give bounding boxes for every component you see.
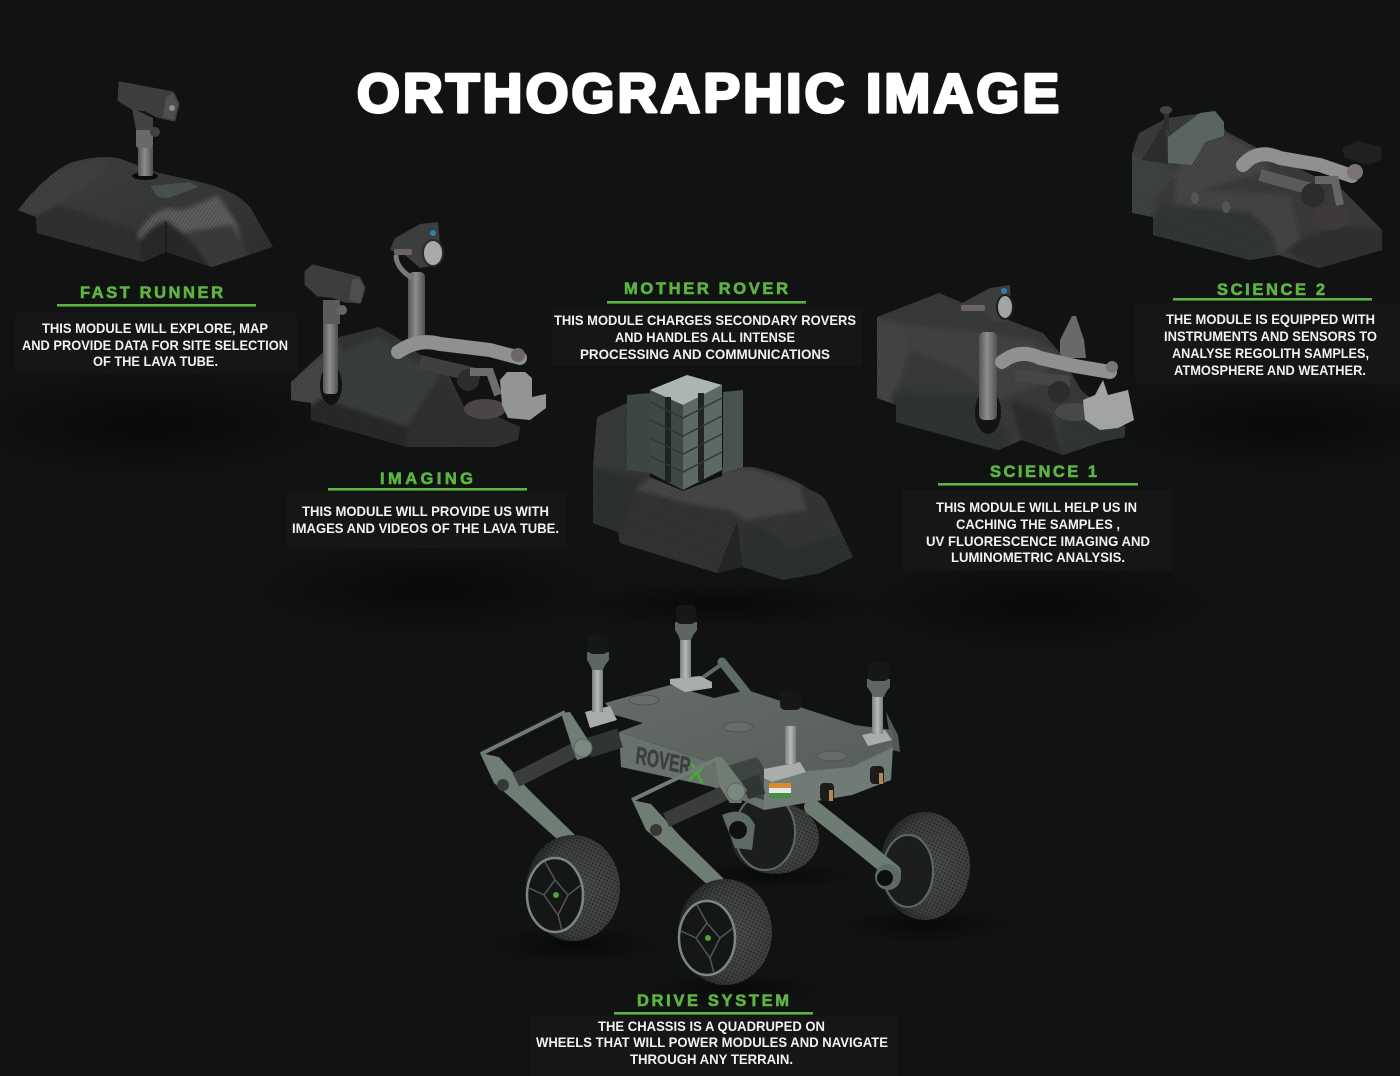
pole and hole (975, 390, 1001, 434)
rear right leg and wheel (812, 712, 970, 920)
side ports (820, 766, 884, 801)
camera head left (306, 266, 364, 302)
gripper (500, 372, 546, 420)
heading: science 2: SCIENCE 2 (1217, 281, 1325, 299)
text block: fast runner (15, 313, 297, 373)
body shell (590, 400, 860, 585)
rear left bracket (688, 662, 746, 692)
heading: mother rover: MOTHER ROVER (624, 280, 788, 298)
body shell (1132, 114, 1382, 268)
text block: science 2: INSTRUMENTS AND SENSORS TO (1164, 328, 1377, 344)
chassis side (619, 732, 893, 810)
body shell (18, 157, 273, 267)
green tank panel (1168, 111, 1224, 165)
panel: rover drive system render (480, 605, 970, 985)
heading: drive system: DRIVE SYSTEM (637, 992, 789, 1010)
text block: drive system: THE CHASSIS IS A QUADRUPED ON (598, 1018, 825, 1034)
text block: imaging: THIS MODULE WILL PROVIDE US WITH (302, 503, 549, 519)
text block: drive system (530, 1016, 898, 1076)
top plate discs (629, 695, 847, 761)
heading: fast runner: FAST RUNNER (80, 284, 223, 302)
rover logo: ROVER (634, 742, 692, 781)
panel: fast runner module render (10, 83, 280, 270)
text block: drive system: WHEELS THAT WILL POWER MODULES AND NAVIGATE (536, 1034, 888, 1050)
text block: imaging (287, 493, 566, 548)
text block: science 2 (1135, 303, 1400, 383)
small antenna (1160, 106, 1172, 130)
camera (961, 285, 1013, 322)
text block: science 1: CACHING THE SAMPLES , (956, 516, 1120, 532)
body shell (877, 293, 1125, 455)
floor shadows (0, 370, 1400, 1008)
text block: science 1 (902, 490, 1172, 571)
front left wheel (526, 835, 620, 941)
robot arm and gripper (1002, 354, 1134, 430)
text block: fast runner: OF THE LAVA TUBE. (93, 353, 218, 369)
upper camera (390, 222, 443, 278)
text block: mother rover (552, 308, 862, 366)
rear wheel (722, 794, 819, 874)
sensor mast 2 (670, 605, 712, 692)
title: ORTHOGRAPHIC IMAGE (357, 62, 1059, 124)
right pole (408, 272, 425, 342)
rover logo: X (687, 756, 707, 790)
sensor mast 1 (585, 635, 617, 728)
carbon ports (1191, 192, 1230, 213)
text block: fast runner: THIS MODULE WILL EXPLORE, MAP (42, 320, 268, 336)
sensor cone (1060, 316, 1086, 358)
text block: mother rover: AND HANDLES ALL INTENSE (615, 329, 795, 345)
text block: drive system: THROUGH ANY TERRAIN. (630, 1051, 793, 1067)
text block: mother rover: THIS MODULE CHARGES SECONDARY ROVERS (554, 312, 856, 328)
camera stalk (138, 146, 153, 176)
indian flag (769, 783, 791, 798)
text block: mother rover: PROCESSING AND COMMUNICATIONS (580, 346, 830, 362)
robot arm (1243, 154, 1363, 230)
heading: science 1: SCIENCE 1 (990, 463, 1097, 481)
sensor head (1342, 141, 1382, 165)
robot arm (398, 342, 546, 420)
left pole and hole (320, 365, 342, 405)
heading: imaging: IMAGING (380, 470, 473, 488)
chassis top plate (605, 685, 893, 772)
front left leg (480, 712, 620, 840)
text block: imaging: IMAGES AND VIDEOS OF THE LAVA TUBE. (292, 520, 559, 536)
text block: science 1: THIS MODULE WILL HELP US IN (936, 499, 1137, 515)
front middle leg (632, 757, 762, 887)
front middle wheel (678, 879, 772, 985)
camera head (119, 83, 178, 120)
panel: imaging module render (285, 222, 546, 452)
text block: science 2: ANALYSE REGOLITH SAMPLES, (1172, 345, 1369, 361)
sensor mast 3 (764, 691, 806, 782)
text block: science 1: LUMINOMETRIC ANALYSIS. (951, 549, 1125, 565)
body shell (291, 327, 520, 447)
panel: mother rover module render (590, 375, 860, 585)
text block: science 2: THE MODULE IS EQUIPPED WITH (1166, 311, 1375, 327)
text block: science 2: ATMOSPHERE AND WEATHER. (1174, 362, 1366, 378)
battery tower (627, 375, 743, 491)
sensor mast 4 (862, 662, 892, 746)
text block: fast runner: AND PROVIDE DATA FOR SITE SELECTION (22, 337, 288, 353)
screen (150, 182, 198, 198)
text block: science 1: UV FLUORESCENCE IMAGING AND (926, 533, 1150, 549)
panel: science 1 module render (870, 285, 1134, 460)
panel: science 2 module render (1132, 106, 1382, 268)
